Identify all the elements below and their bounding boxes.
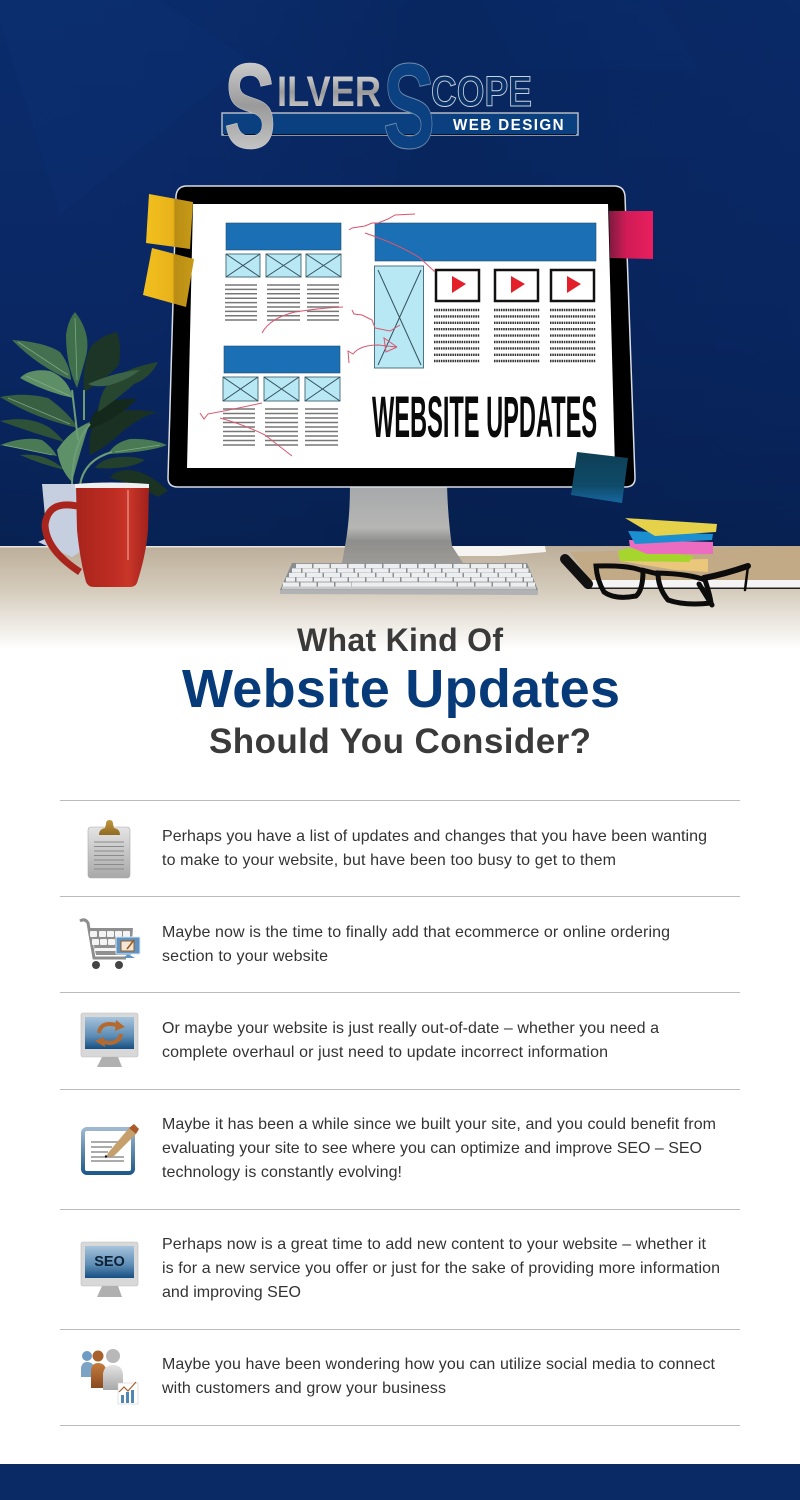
icon: edit document (83, 1124, 139, 1173)
monitor (168, 186, 635, 487)
icon: shopping cart (80, 920, 140, 969)
row 3 text: Or maybe your website is just really out-of-date – whether you need a (162, 1020, 659, 1037)
wireframe right (374, 223, 596, 368)
plant pot (38, 484, 80, 557)
logo bar (222, 113, 578, 135)
red mug (45, 482, 149, 587)
logo blue wordmark: S (383, 37, 435, 174)
sticky notes on monitor (143, 194, 653, 503)
row 4 text (162, 1116, 716, 1181)
plant (0, 312, 168, 497)
logo tagline: WEB DESIGN (453, 117, 565, 134)
footer bar (0, 1464, 800, 1500)
logo blue wordmark: COPE (431, 68, 532, 116)
row 1 text (162, 828, 707, 869)
row 5 text: is for a new service you offer or just for the sake of providing more information (162, 1260, 720, 1277)
row 6 text: Maybe you have been wondering how you can utilize social media to connect (162, 1356, 716, 1373)
screen title: website updates: WEBSITE UPDATES (372, 386, 597, 450)
row 3 text (162, 1020, 659, 1061)
keyboard (280, 563, 538, 595)
row 2 text: section to your website (162, 948, 328, 965)
row 5 text: Perhaps now is a great time to add new content to your website – whether it (162, 1236, 707, 1253)
logo blue wordmark (383, 37, 532, 174)
row 2 text (162, 924, 670, 965)
heading: Website Updates (182, 659, 620, 719)
hero illustration (0, 0, 800, 650)
icon: SEO monitor (81, 1242, 138, 1297)
icon: clipboard (88, 820, 130, 878)
logo silver wordmark: S (224, 37, 276, 174)
red sketch annotations (200, 214, 435, 456)
row 2 text: Maybe now is the time to finally add that ecommerce or online ordering (162, 924, 670, 941)
row 4 text: Maybe it has been a while since we built your site, and you could benefit from (162, 1116, 716, 1133)
row 6 text: with customers and grow your business (161, 1380, 446, 1397)
icon: SEO monitor: SEO (94, 1254, 125, 1270)
logo silver wordmark: ILVER (277, 68, 381, 116)
stack of sticky notes (618, 518, 717, 572)
row 5 text (162, 1236, 720, 1301)
heading: Should You Consider? (209, 722, 591, 761)
wireframe left bottom (223, 346, 340, 445)
row 6 text (161, 1356, 716, 1397)
icon: monitor with refresh (81, 1013, 138, 1067)
row 4 text: evaluating your site to see where you can optimize and improve SEO – SEO (162, 1140, 702, 1157)
row 4 text: technology is constantly evolving! (162, 1164, 402, 1181)
notebook and pen (565, 546, 800, 589)
row 5 text: and improving SEO (162, 1284, 301, 1301)
monitor stand (342, 485, 463, 563)
icon: people and chart (81, 1349, 138, 1404)
heading (182, 622, 620, 761)
company logo (222, 37, 578, 174)
desk surface (0, 546, 800, 650)
eyeglasses (596, 566, 748, 605)
wireframe left top (225, 223, 341, 320)
row 1 text: Perhaps you have a list of updates and changes that you have been wanting (162, 828, 707, 845)
row 3 text: complete overhaul or just need to update incorrect information (162, 1044, 608, 1061)
heading: What Kind Of (297, 622, 503, 658)
row 1 text: to make to your website, but have been too busy to get to them (162, 852, 616, 869)
navy background (0, 0, 800, 550)
logo silver wordmark (224, 37, 381, 174)
